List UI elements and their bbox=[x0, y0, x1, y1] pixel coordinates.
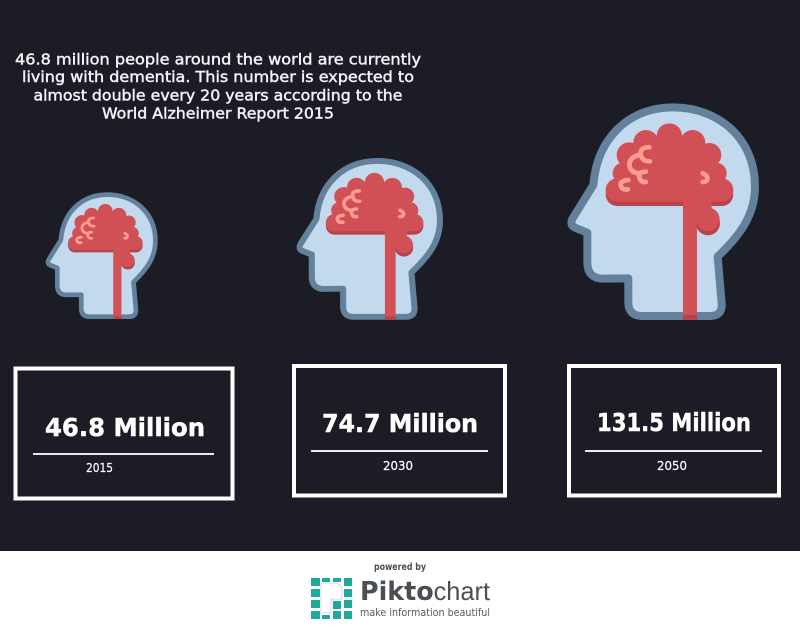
icon: medium head with brain bbox=[300, 161, 440, 320]
intro text: 46.8 million people around the world are currently bbox=[15, 50, 421, 68]
icon: small head with brain bbox=[48, 195, 155, 319]
year 2015: 2015 bbox=[86, 461, 113, 475]
icon: Piktochart logo bbox=[311, 578, 352, 619]
intro text: World Alzheimer Report 2015 bbox=[102, 104, 334, 122]
panel: 2050 bbox=[569, 366, 779, 496]
tagline: make information beautiful bbox=[360, 607, 490, 619]
value 2030: 74.7 Million bbox=[322, 409, 478, 438]
panel: 2030 bbox=[294, 366, 505, 496]
year 2050: 2050 bbox=[657, 459, 687, 473]
value 2015: 46.8 Million bbox=[45, 413, 205, 442]
value 2050: 131.5 Million bbox=[597, 408, 751, 437]
year 2030: 2030 bbox=[383, 459, 413, 473]
panel: 2015 bbox=[16, 368, 232, 498]
footer bbox=[0, 551, 800, 631]
intro text: living with dementia. This number is expected to bbox=[22, 68, 414, 86]
intro text: almost double every 20 years according to the bbox=[34, 86, 402, 104]
intro text bbox=[15, 50, 421, 122]
powered by: powered by bbox=[374, 562, 426, 573]
wordmark: Piktochart bbox=[360, 576, 491, 607]
icon: large head with brain bbox=[571, 107, 755, 320]
